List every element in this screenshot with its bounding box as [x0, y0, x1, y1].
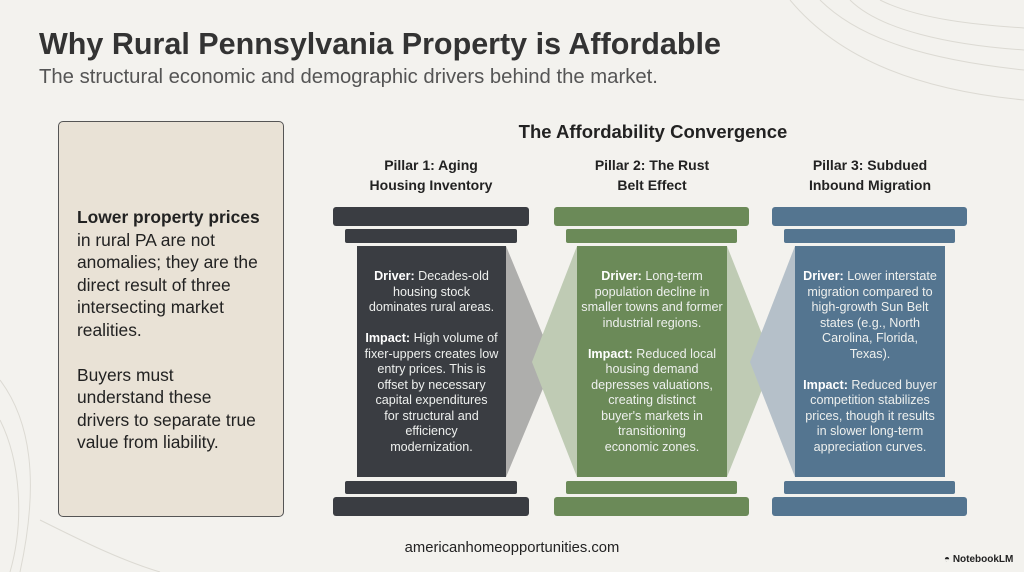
panel: intro: direct result of three: [77, 274, 231, 294]
pillar 3 text: [803, 269, 937, 454]
panel: intro: drivers to separate true: [77, 410, 256, 430]
pillar 1 text: for structural and: [384, 408, 479, 422]
pillar 1 text: entry prices. This is: [377, 362, 486, 376]
pillar 2 text: smaller towns and former: [581, 300, 723, 314]
pillar 1 text: fixer-uppers creates low: [365, 346, 498, 360]
panel: intro: [58, 121, 284, 517]
pillar titles: Inbound Migration: [809, 177, 931, 193]
pillar 1 text: Driver: Decades-old: [374, 269, 489, 283]
pillar 1 text: modernization.: [390, 440, 473, 454]
pillar 1 text: capital expenditures: [375, 393, 488, 407]
pillar titles: Pillar 3: Subdued: [813, 157, 927, 173]
panel: intro: Buyers must: [77, 364, 174, 384]
pillar 2 text: economic zones.: [605, 440, 699, 454]
pillar 3 text: Impact: Reduced buyer: [803, 378, 937, 392]
pillar 3 text: in slower long-term: [817, 424, 923, 438]
pillar 1 text: housing stock: [393, 284, 470, 298]
pillar 1 text: efficiency: [405, 424, 458, 438]
panel: intro: in rural PA are not: [77, 230, 215, 250]
pillar 3 text: Carolina, Florida,: [822, 331, 918, 345]
pillar 3 text: states (e.g., North: [820, 316, 920, 330]
pillar 3 text: high-growth Sun Belt: [812, 300, 928, 314]
pillar 2 text: housing demand: [605, 362, 699, 376]
pillar 2 text: [581, 269, 723, 454]
panel: intro: anomalies; they are the: [77, 252, 258, 272]
pillar 2 text: transitioning: [618, 424, 686, 438]
pillar 3 text: migration compared to: [807, 284, 933, 298]
pillar 3 text: prices, though it results: [805, 408, 935, 422]
pillar titles: Belt Effect: [617, 177, 687, 193]
logo: NotebookLM: ◓ NotebookLM: [944, 554, 1013, 565]
pillar 2 text: industrial regions.: [603, 316, 701, 330]
subtitle: The structural economic and demographic drivers behind the market.: [39, 66, 658, 88]
pillar 3 text: appreciation curves.: [814, 440, 926, 454]
title: Why Rural Pennsylvania Property is Affordable: [39, 27, 721, 61]
panel: intro: value from liability.: [77, 432, 219, 452]
panel: intro: realities.: [77, 320, 142, 340]
pillar 1 text: [364, 269, 498, 454]
pillar titles: Pillar 1: Aging: [384, 157, 478, 173]
pillar 1 text: offset by necessary: [377, 378, 486, 392]
pillar 2 text: buyer's markets in: [601, 408, 703, 422]
pillar 2 text: depresses valuations,: [591, 378, 713, 392]
pillar 3 text: Driver: Lower interstate: [803, 269, 937, 283]
pillar 2 text: Driver: Long-term: [601, 269, 703, 283]
pillar 1 text: dominates rural areas.: [369, 300, 494, 314]
heading: convergence: The Affordability Convergence: [519, 121, 787, 142]
pillar 2 text: creating distinct: [608, 393, 696, 407]
convergence wedges: [506, 246, 795, 477]
pillar titles: Pillar 2: The Rust: [595, 157, 709, 173]
pillar 3 text: Texas).: [850, 346, 890, 360]
pillar titles: [370, 157, 931, 193]
pillar 1 text: Impact: High volume of: [365, 331, 498, 345]
pillar 2 text: Impact: Reduced local: [588, 346, 716, 360]
footer url: americanhomeopportunities.com: [405, 540, 619, 556]
panel: intro: Lower property prices: [77, 207, 260, 227]
pillar titles: Housing Inventory: [370, 177, 492, 193]
panel: intro: intersecting market: [77, 297, 224, 317]
pillar 3 text: competition stabilizes: [810, 393, 930, 407]
pillar 2 text: population decline in: [595, 284, 709, 298]
panel: intro: understand these: [77, 387, 211, 407]
